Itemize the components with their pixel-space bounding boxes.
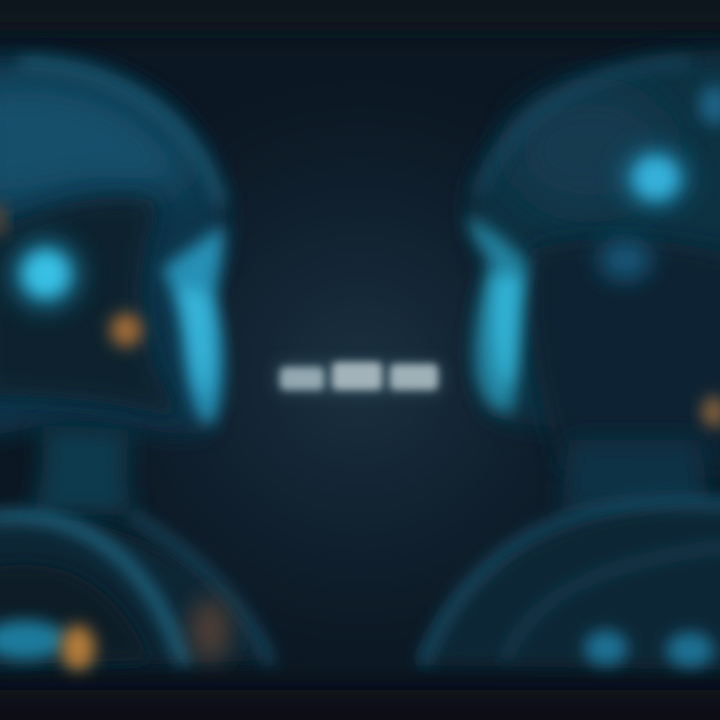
right eye: [633, 156, 679, 200]
right head texture: [510, 90, 670, 210]
right head skull: [470, 50, 720, 440]
left shoulder arc outer: [130, 515, 272, 665]
right eye glow: [620, 146, 692, 210]
left eye: [22, 250, 70, 298]
left face cyan edge: [162, 225, 223, 425]
right orange node: [702, 396, 720, 428]
left figure: [0, 56, 272, 671]
left chest dark: [0, 565, 150, 665]
left face dark hollow: [0, 197, 185, 420]
left chest cyan: [0, 620, 67, 660]
left head upper glow: [0, 79, 195, 205]
right lower face dark: [527, 239, 720, 480]
right shoulder fill: [420, 500, 720, 670]
right head rim: [478, 62, 690, 195]
left chest orange: [61, 625, 95, 671]
left head skull: [0, 56, 227, 440]
left head outline rim: [20, 62, 222, 205]
left neck: [30, 425, 135, 515]
left shoulder arc inner: [0, 516, 185, 665]
right face bright highlight: [492, 275, 520, 390]
left small orange mark: [0, 204, 6, 236]
right top corner glow: [699, 85, 720, 125]
left eye glow: [8, 236, 84, 312]
right shoulder arc outer: [422, 502, 720, 665]
left shoulder fill: [0, 518, 270, 670]
left face bright highlight: [180, 285, 211, 395]
right neck: [560, 440, 710, 510]
right figure: [420, 50, 720, 670]
right chest dot one: [584, 630, 628, 666]
center label (blurred text): [276, 362, 442, 394]
right chest dot two: [666, 632, 714, 668]
left orange node: [110, 313, 142, 347]
right mid glow: [599, 240, 651, 280]
right shoulder arc inner: [505, 545, 720, 660]
right face cyan edge: [468, 215, 528, 412]
left chest brown haze: [190, 598, 230, 662]
